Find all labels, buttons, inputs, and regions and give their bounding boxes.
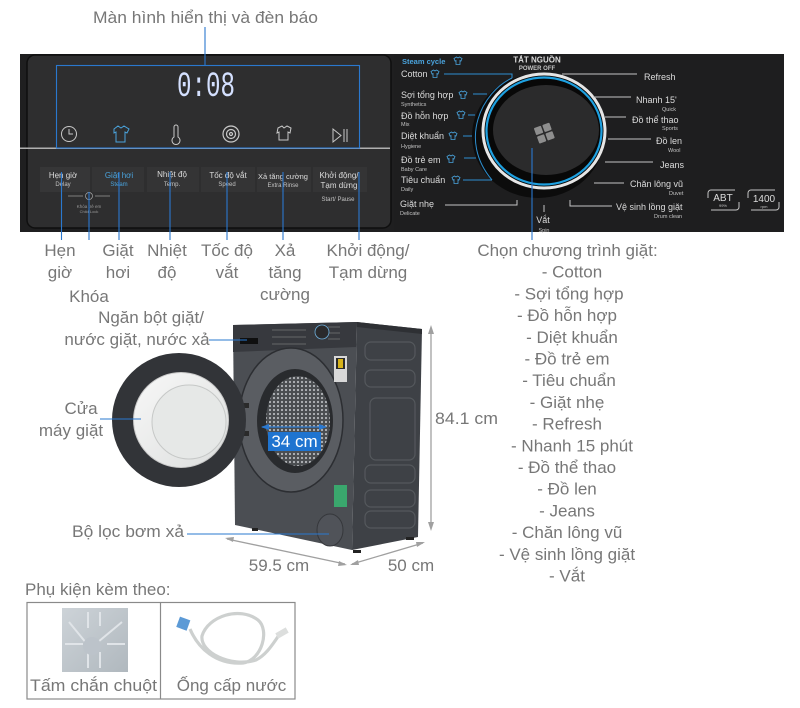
right programme labels: Sports [662, 126, 678, 132]
right programme labels: Refresh [644, 72, 676, 82]
right programme labels: Vệ sinh lồng giặt [616, 202, 683, 212]
left programme labels: Tiêu chuẩn [401, 175, 445, 185]
icon: rinse shirt [277, 126, 291, 140]
dial [472, 74, 605, 198]
steam shirt icons [431, 57, 467, 184]
right programme labels: Jeans [660, 160, 685, 170]
label: depth: 50 cm [388, 556, 434, 575]
label: width: 59.5 cm [249, 556, 309, 575]
left programme labels: Synthetics [401, 102, 427, 108]
energy labels [334, 356, 347, 382]
steam button [92, 167, 144, 192]
speed button [201, 167, 255, 192]
label: delay: Hẹn [44, 241, 76, 260]
start button [313, 167, 367, 203]
label: rinse: Xả [275, 241, 295, 260]
left programme labels: Daily [401, 187, 413, 193]
left programme labels: Giặt nhẹ [400, 199, 434, 209]
label: temperature: Nhiệt [147, 241, 187, 260]
right programme labels: Đồ thể thao [632, 115, 679, 125]
display time: 0:08 [177, 67, 235, 107]
washing machine [112, 322, 422, 553]
label: speed: Tốc độ [201, 241, 253, 260]
programme list: - Đồ trẻ em [524, 350, 610, 368]
left programme labels: Sợi tổng hợp [401, 90, 453, 100]
left programme labels: Delicate [400, 211, 420, 217]
right programme labels: Spin [538, 228, 550, 234]
label: door: máy giặt [39, 421, 103, 440]
height arrow [428, 325, 434, 531]
start button: Khởi động/ [319, 171, 359, 180]
porthole [239, 348, 343, 492]
child lock [68, 192, 110, 214]
label: detergent drawer: Ngăn bột giặt/ [98, 308, 204, 327]
label: lock: Khóa [69, 287, 109, 306]
callout lines machine [100, 340, 329, 534]
drum width arrow [261, 424, 327, 430]
label: speed: vắt [216, 263, 239, 282]
feet [252, 528, 414, 553]
accessories box [27, 602, 295, 699]
child lock: Child Lock [80, 209, 98, 214]
accessories heading: Phụ kiện kèm theo: [25, 580, 171, 599]
right programme labels: Wool [668, 148, 680, 154]
left programme labels [400, 57, 453, 217]
programme list: - Sợi tổng hợp [514, 284, 624, 303]
door hinges [236, 403, 249, 408]
right programme labels: Duvet [669, 191, 684, 197]
programme list: - Diệt khuẩn [526, 328, 618, 347]
dial top labels: POWER OFF [519, 66, 555, 72]
dial top labels [513, 54, 561, 72]
left programme labels: Đồ hỗn hợp [401, 111, 448, 121]
start button: Start/ Pause [321, 197, 355, 203]
icon: play pause [333, 129, 347, 142]
delay button: Delay [55, 182, 71, 188]
steam cycle arc [444, 74, 512, 180]
speed button: Tốc độ vắt [209, 171, 247, 180]
badge 1400: 1400 [753, 194, 776, 205]
rinse button [257, 167, 311, 192]
label: rinse: cường [260, 285, 310, 304]
left programme labels: Baby Care [401, 167, 427, 173]
callout leader lines [62, 27, 532, 240]
left programme labels: Mix [401, 122, 410, 128]
left programme labels: Steam cycle [402, 57, 445, 66]
programme list: - Refresh [532, 415, 602, 434]
depth arrow [350, 542, 425, 565]
steam button: Steam [110, 182, 128, 188]
left programme labels: Diệt khuẩn [401, 131, 444, 141]
badge ABT: ABT [713, 193, 733, 204]
programme list: - Jeans [539, 501, 595, 520]
title label: Màn hình hiển thị và đèn báo [93, 8, 318, 27]
badge ABT [708, 190, 739, 210]
speed button: Speed [218, 182, 236, 188]
programme list: - Chăn lông vũ [512, 523, 622, 542]
programme list: - Tiêu chuẩn [522, 371, 616, 390]
programme list: - Giặt nhẹ [530, 393, 604, 412]
temperature button: Nhiệt độ [157, 170, 187, 179]
label: door: Cửa [64, 399, 98, 418]
icon: metal plate [62, 608, 128, 672]
right programme labels: Chăn lông vũ [630, 179, 683, 189]
delay button: Hẹn giờ [49, 171, 78, 180]
label: start pause: Khởi động/ [327, 241, 409, 260]
programme list: - Vệ sinh lồng giặt [499, 545, 635, 564]
rinse button: Extra Rinse [267, 183, 299, 189]
icon: delay [62, 126, 76, 142]
front body [233, 322, 357, 550]
drum width label: 34 cm [271, 432, 318, 451]
open door [112, 353, 246, 487]
label: temperature: độ [158, 263, 176, 282]
label: plate: Tấm chắn chuột [30, 676, 157, 695]
icon: spin [223, 126, 239, 142]
label: hose: Ống cấp nước [177, 675, 287, 695]
label: filter: Bộ lọc bơm xả [72, 522, 185, 541]
rinse button: Xả tăng cường [258, 172, 308, 181]
right programme labels [536, 72, 685, 234]
steam button: Giặt hơi [105, 171, 133, 180]
panel: control panel photo [20, 54, 784, 234]
programme list: - Cotton [542, 263, 602, 282]
display highlight box [56, 66, 360, 148]
badge 1400: rpm [761, 204, 768, 209]
label: steam: Giặt [102, 241, 134, 260]
filter cover [317, 514, 343, 546]
right programme labels: Nhanh 15' [636, 95, 677, 105]
right programme labels: Đồ len [656, 136, 682, 146]
side panel [352, 322, 422, 550]
dial top labels: TẮT NGUỒN [513, 54, 561, 64]
badge ABT: 99% [719, 203, 727, 208]
child lock: Khóa trẻ em [77, 204, 102, 209]
badge 1400 [748, 190, 779, 210]
width arrow [225, 537, 347, 566]
right programme labels: Quick [662, 107, 676, 113]
programme list: - Đồ len [537, 480, 597, 499]
delay button [40, 167, 90, 192]
icon: thermometer [172, 125, 180, 144]
dial leader lines [445, 74, 653, 212]
icon: steam shirt [114, 126, 129, 142]
label: rinse: tăng [268, 263, 302, 282]
programme list: - Nhanh 15 phút [511, 436, 633, 455]
label: detergent drawer: nước giặt, nước xả [64, 330, 210, 349]
programme list: - Đồ hỗn hợp [517, 306, 617, 325]
temperature button: Temp. [164, 182, 180, 188]
temperature button [147, 167, 199, 192]
left programme labels: Cotton [401, 69, 428, 79]
label: start pause: Tạm dừng [329, 263, 407, 282]
start button: Tạm dừng [321, 181, 357, 190]
programme list: Chọn chương trình giặt: [477, 241, 658, 260]
right programme labels: Drum clean [654, 214, 682, 220]
programme list: - Đồ thể thao [518, 458, 616, 477]
left programme labels: Đồ trẻ em [401, 155, 441, 165]
icon: hose [176, 613, 289, 663]
label: delay: giờ [48, 263, 72, 282]
left programme labels: Hygiene [401, 144, 421, 150]
programme list: - Vắt [549, 566, 585, 586]
right programme labels: Vắt [536, 215, 550, 225]
label: height: 84.1 cm [435, 409, 498, 428]
label: steam: hơi [106, 263, 130, 282]
